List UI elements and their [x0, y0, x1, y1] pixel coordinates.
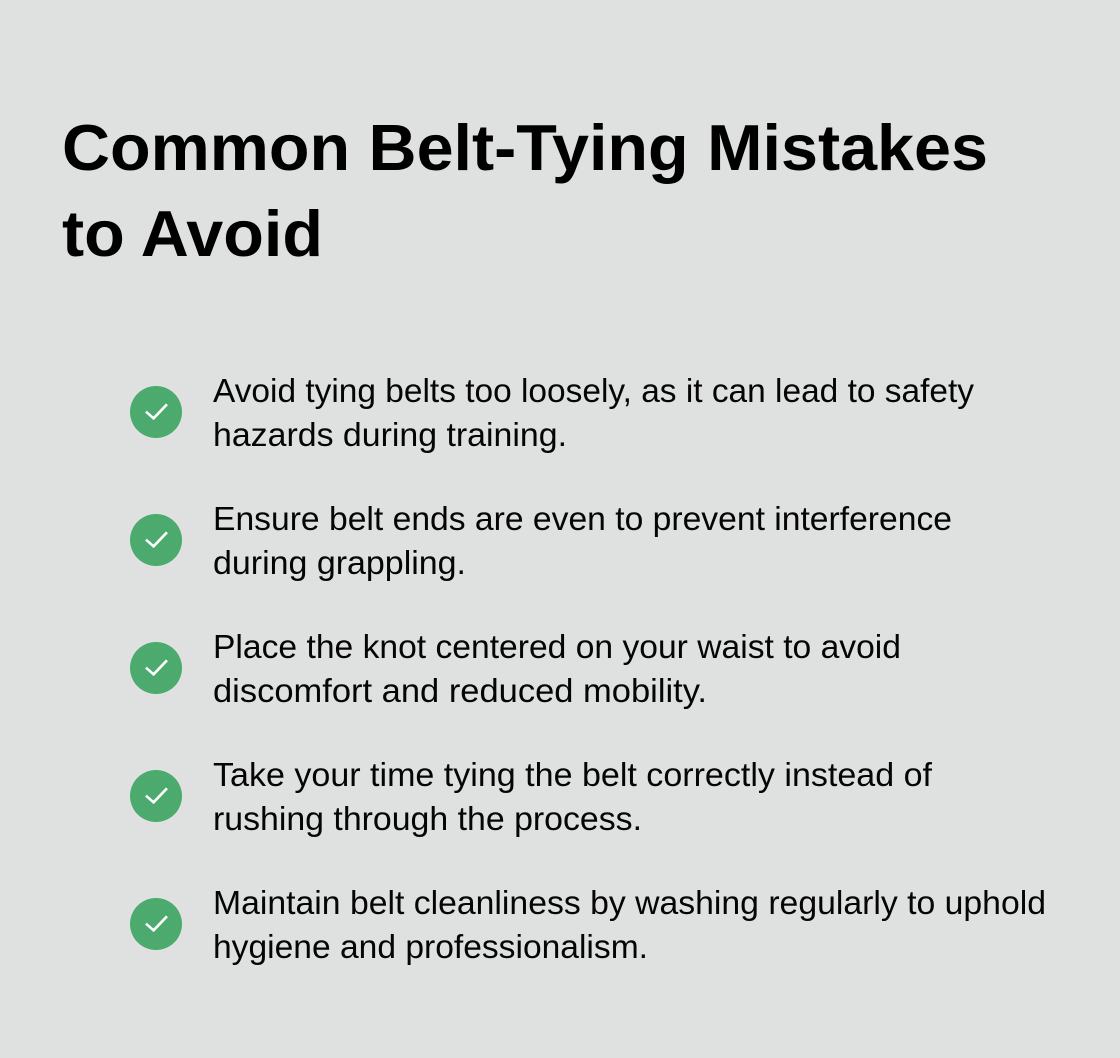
title: to Avoid: [62, 197, 323, 270]
title: Common Belt-Tying Mistakes: [62, 111, 988, 184]
tip 2 text: during grappling.: [213, 544, 466, 581]
tip 4 text: [213, 756, 933, 837]
tip 1: [130, 372, 974, 453]
tip 2 text: Ensure belt ends are even to prevent interference: [213, 500, 952, 537]
title: [62, 111, 988, 270]
icon: check mark 1: [130, 386, 182, 438]
tip 1 text: Avoid tying belts too loosely, as it can lead to safety: [213, 372, 974, 409]
tip 5: [130, 884, 1046, 965]
tip 4: [130, 756, 933, 837]
tip 3 text: discomfort and reduced mobility.: [213, 672, 707, 709]
tip 5 text: [213, 884, 1046, 965]
icon: check mark 5: [130, 898, 182, 950]
icon: check mark 4: [130, 770, 182, 822]
tip 2 text: [213, 500, 952, 581]
tip 4 text: rushing through the process.: [213, 800, 642, 837]
tip 3: [130, 628, 901, 709]
list of tips: [130, 372, 1046, 965]
tip 1 text: hazards during training.: [213, 416, 567, 453]
icon: check mark 3: [130, 642, 182, 694]
tip 3 text: Place the knot centered on your waist to avoid: [213, 628, 901, 665]
tip 5 text: hygiene and professionalism.: [213, 928, 648, 965]
tip 1 text: [213, 372, 974, 453]
tip 3 text: [213, 628, 901, 709]
tip 2: [130, 500, 952, 581]
tip 4 text: Take your time tying the belt correctly instead of: [213, 756, 933, 793]
icon: check mark 2: [130, 514, 182, 566]
tip 5 text: Maintain belt cleanliness by washing regularly to uphold: [213, 884, 1046, 921]
